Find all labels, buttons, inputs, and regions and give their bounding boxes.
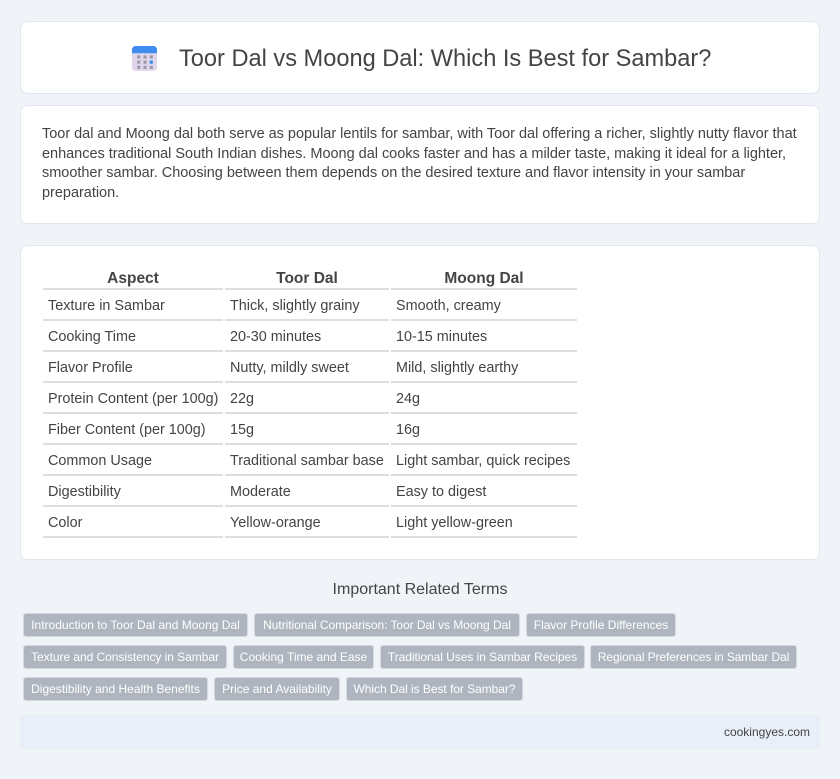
comparison table: Traditional sambar base xyxy=(230,453,384,469)
comparison table: Common Usage xyxy=(48,453,152,469)
title: Toor Dal vs Moong Dal: Which Is Best for Sambar? xyxy=(179,46,711,72)
comparison table: Thick, slightly grainy xyxy=(230,298,360,314)
comparison table: 16g xyxy=(396,422,420,438)
comparison table: Texture in Sambar xyxy=(48,298,165,314)
comparison table: Color xyxy=(48,515,82,531)
comparison table: Light sambar, quick recipes xyxy=(396,453,570,469)
related term tags: Which Dal is Best for Sambar? xyxy=(354,682,515,696)
comparison table: Toor Dal xyxy=(276,270,338,287)
comparison table: Moderate xyxy=(230,484,291,500)
related term tags: Nutritional Comparison: Toor Dal vs Moong Dal xyxy=(263,618,511,632)
comparison table: Moong Dal xyxy=(444,270,524,287)
panel: comparison table xyxy=(20,245,820,560)
icon: calendar xyxy=(132,46,157,71)
comparison table: Flavor Profile xyxy=(48,360,133,376)
related term tags: Texture and Consistency in Sambar xyxy=(31,650,219,664)
text block: introduction: smoother sambar. Choosing between them depends on the desired texture and flavor intensity in your sambar xyxy=(42,165,745,181)
comparison table: Protein Content (per 100g) xyxy=(48,391,218,407)
panel: title header xyxy=(20,21,820,94)
comparison table: 20-30 minutes xyxy=(230,329,321,345)
related term tags: Price and Availability xyxy=(222,682,332,696)
comparison table: 22g xyxy=(230,391,254,407)
comparison table: Smooth, creamy xyxy=(396,298,501,314)
panel: intro text xyxy=(20,105,820,224)
footer source: cookingyes.com xyxy=(724,725,810,739)
comparison table: Yellow-orange xyxy=(230,515,321,531)
text block: introduction: preparation. xyxy=(42,185,119,201)
comparison table: Fiber Content (per 100g) xyxy=(48,422,206,438)
related term tags xyxy=(23,613,797,701)
text block: introduction: enhances traditional South Indian dishes. Moong dal cooks faster and has a milder taste, making it ideal for a lighter, xyxy=(42,146,786,162)
related term tags: Flavor Profile Differences xyxy=(534,618,668,632)
related term tags: Cooking Time and Ease xyxy=(240,650,367,664)
footer bar xyxy=(20,715,820,749)
comparison table: Mild, slightly earthy xyxy=(396,360,518,376)
related term tags: Introduction to Toor Dal and Moong Dal xyxy=(31,618,240,632)
related term tags: Regional Preferences in Sambar Dal xyxy=(598,650,789,664)
text block: introduction xyxy=(42,126,797,201)
related term tags: Traditional Uses in Sambar Recipes xyxy=(388,650,577,664)
comparison table: Easy to digest xyxy=(396,484,486,500)
comparison table: Light yellow-green xyxy=(396,515,513,531)
comparison table: Cooking Time xyxy=(48,329,136,345)
comparison table: 15g xyxy=(230,422,254,438)
comparison table: Digestibility xyxy=(48,484,121,500)
comparison table: 24g xyxy=(396,391,420,407)
heading: related terms: Important Related Terms xyxy=(333,581,507,598)
comparison table: 10-15 minutes xyxy=(396,329,487,345)
text block: introduction: Toor dal and Moong dal both serve as popular lentils for sambar, with Toor dal offering a richer, slightly nutty flavor that xyxy=(42,126,797,142)
comparison table: Aspect xyxy=(107,270,159,287)
related term tags: Digestibility and Health Benefits xyxy=(31,682,200,696)
comparison table: Nutty, mildly sweet xyxy=(230,360,349,376)
